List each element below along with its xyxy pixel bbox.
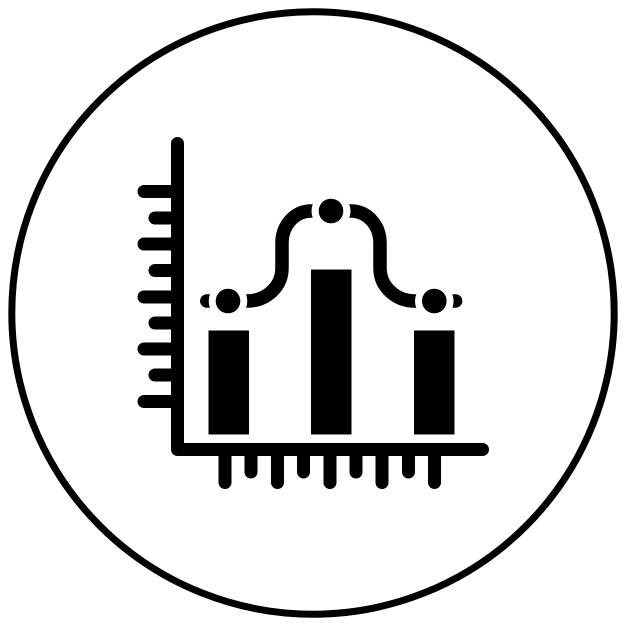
data point: right bbox=[415, 282, 454, 320]
x axis ticks bbox=[225, 450, 434, 482]
bar: middle bbox=[311, 270, 352, 434]
bar: left bbox=[208, 330, 249, 434]
bar: right bbox=[414, 330, 454, 434]
bell curve line bbox=[207, 211, 456, 301]
y axis ticks bbox=[144, 192, 177, 402]
data point: middle bbox=[312, 192, 350, 230]
data point: left bbox=[209, 282, 247, 320]
chart axes bbox=[178, 144, 482, 450]
